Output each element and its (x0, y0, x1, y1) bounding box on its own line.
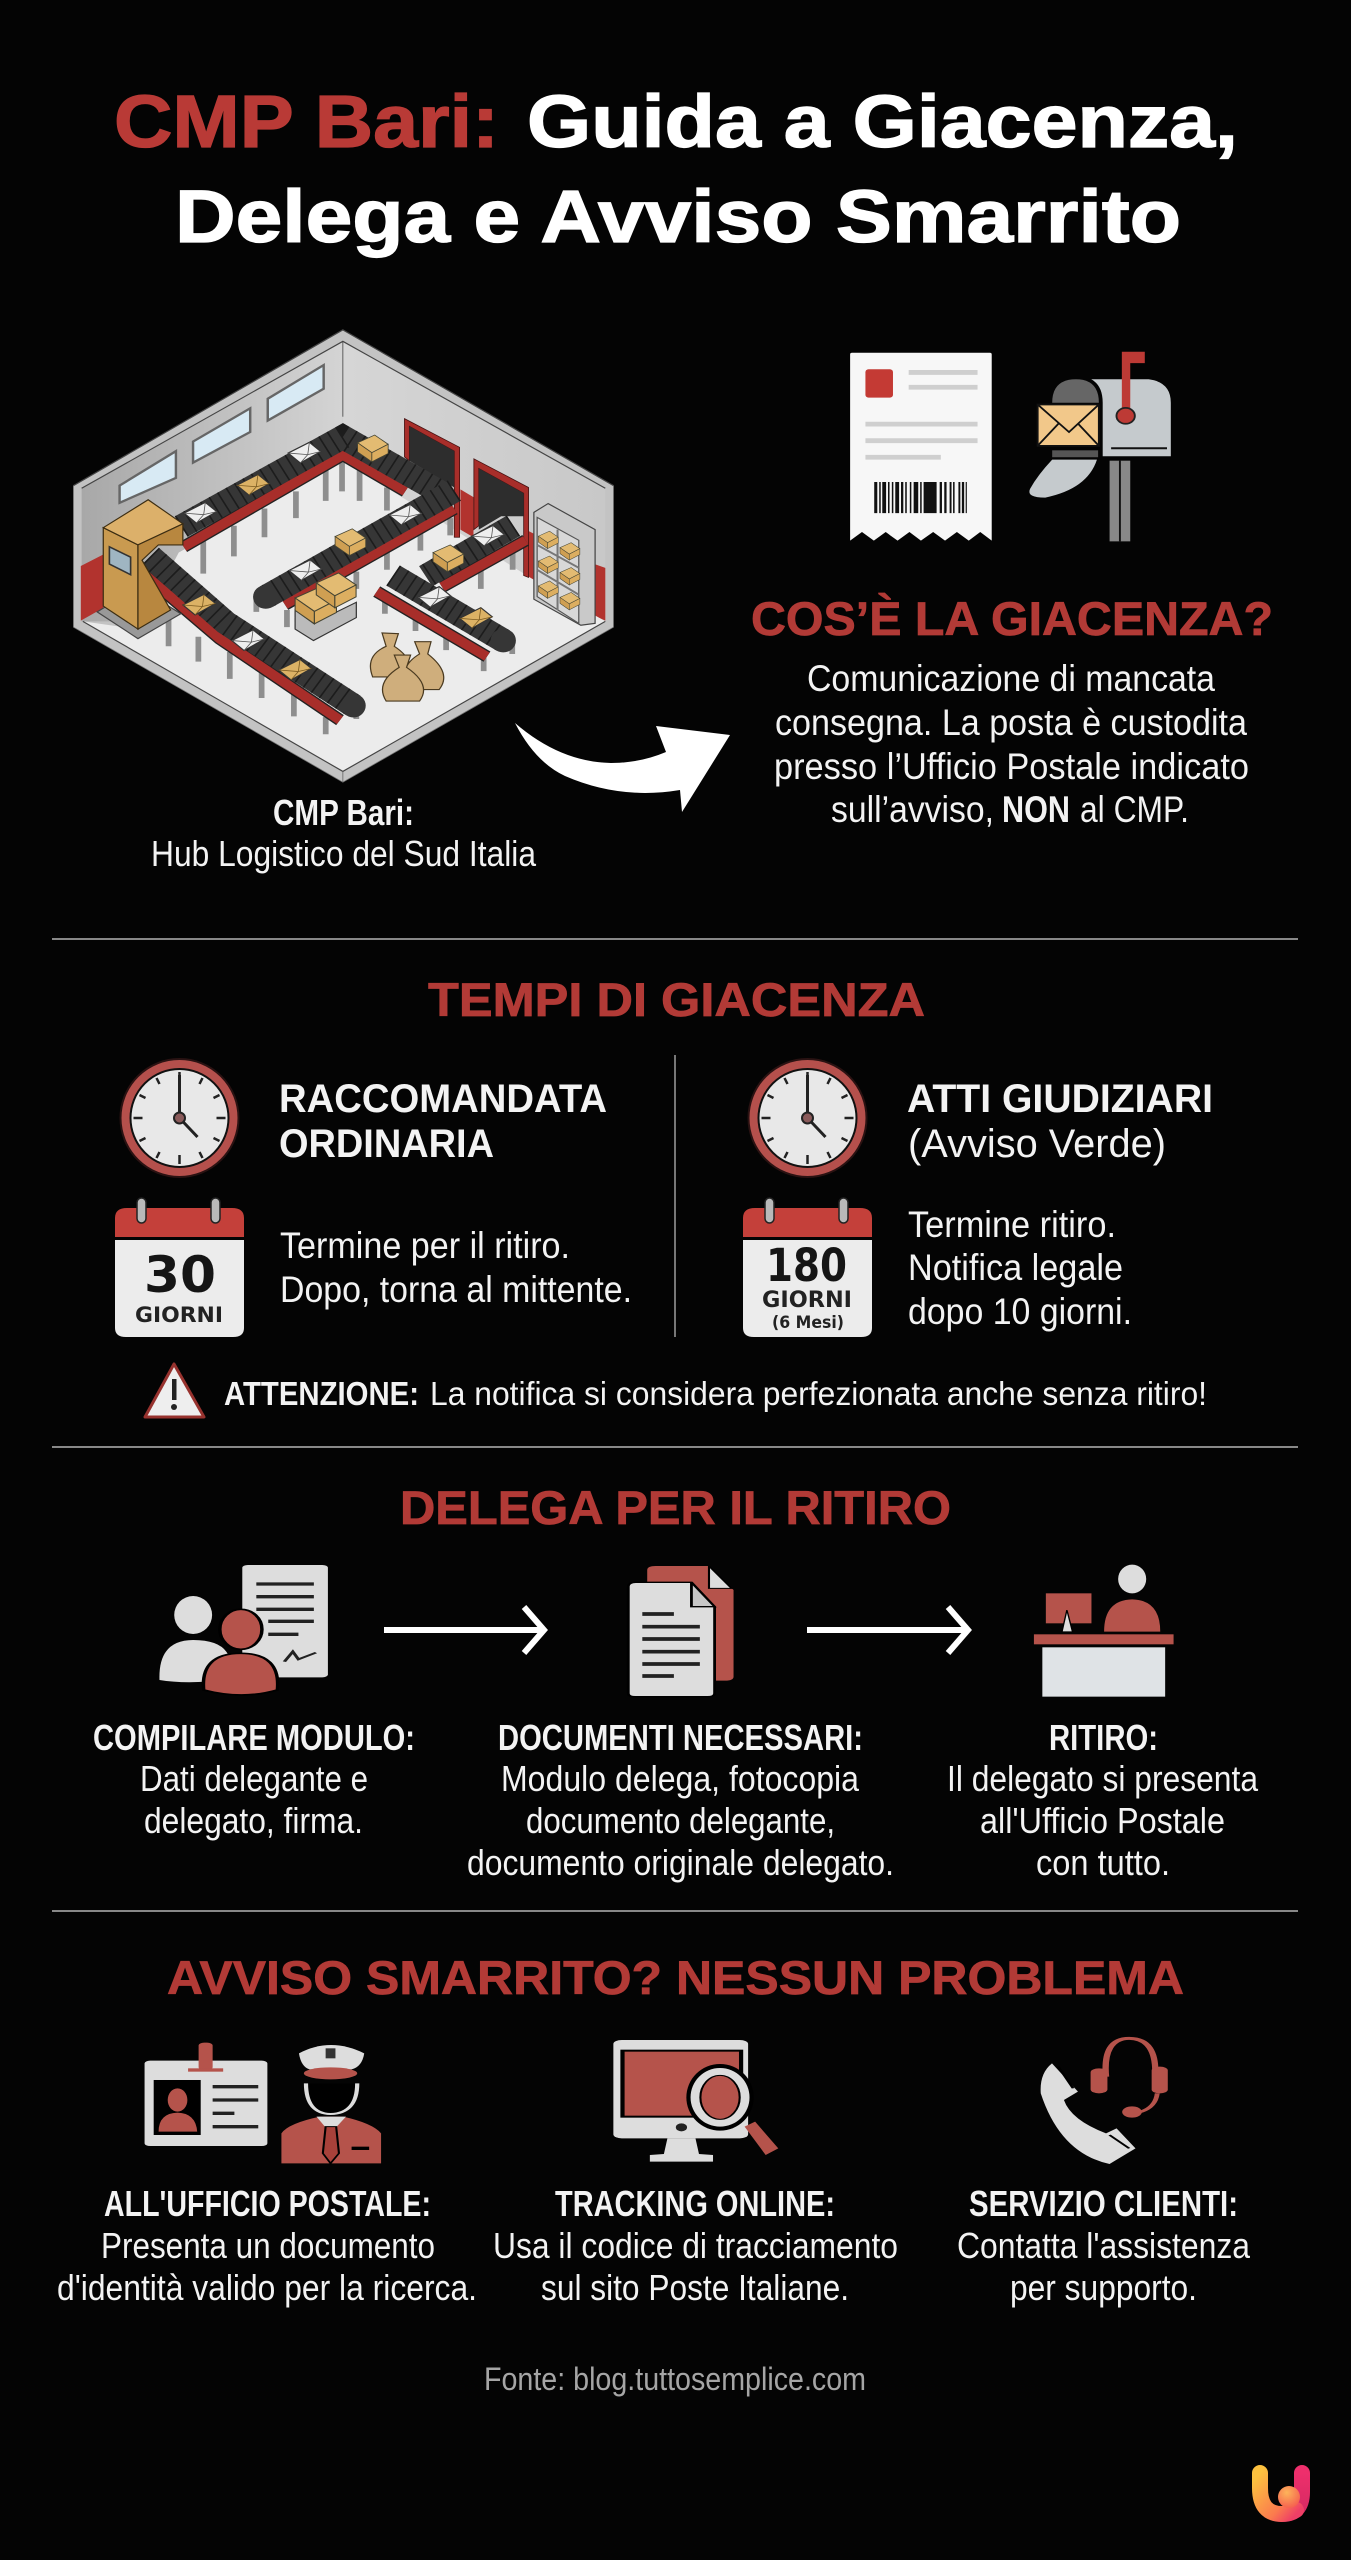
text: giacenza definition: Comunicazione di mancata (807, 658, 1215, 699)
icon: mailbox (1029, 352, 1171, 541)
icon: documents (628, 1566, 734, 1697)
text: termine ritiro atti: Termine ritiro. (908, 1204, 1116, 1245)
step: compilare modulo (93, 1717, 415, 1841)
text: giacenza definition: presso l’Ufficio Postale indicato (774, 746, 1249, 787)
heading: delega per il ritiro: DELEGA PER IL RITIRO (400, 1481, 951, 1534)
panel: atti giudiziari (743, 1059, 1213, 1337)
step: documenti necessari (467, 1717, 894, 1883)
step: documenti necessari: documento originale delegato. (467, 1842, 894, 1883)
panel: raccomandata ordinaria (115, 1059, 632, 1337)
text: termine ritiro atti: Notifica legale (908, 1247, 1123, 1288)
step: compilare modulo: Dati delegante e (140, 1758, 368, 1799)
icon: calendar 30 giorni: GIORNI (135, 1303, 223, 1327)
floor (83, 461, 605, 771)
arrow: hub to giacenza (515, 723, 730, 812)
machine (97, 500, 183, 639)
icon: calendar 180 giorni: GIORNI (762, 1288, 852, 1313)
step: ritiro (947, 1717, 1259, 1883)
callout: attenzione: ATTENZIONE: (224, 1375, 419, 1412)
option: servizio clienti: per supporto. (1010, 2267, 1197, 2308)
text: giacenza definition: sull’avviso, (831, 789, 994, 830)
option: all'ufficio postale: d'identità valido per la ricerca. (57, 2267, 477, 2308)
title: Delega e Avviso Smarrito (175, 175, 1181, 258)
arrow (807, 1607, 968, 1653)
step: compilare modulo: COMPILARE MODULO: (93, 1717, 415, 1758)
icon: calendar 180 giorni: 180 (766, 1239, 847, 1292)
option: tracking online (493, 2183, 898, 2308)
option: tracking online: sul sito Poste Italiane. (541, 2267, 849, 2308)
icon: delivery notice receipt (850, 353, 992, 541)
caption: CMP Bari hub (151, 792, 537, 874)
heading: raccomandata: RACCOMANDATA (279, 1077, 607, 1121)
icon: calendar 30 giorni (115, 1198, 244, 1337)
option: all'ufficio postale: Presenta un documento (101, 2225, 435, 2266)
heading: avviso smarrito: AVVISO SMARRITO? NESSUN PROBLEMA (167, 1951, 1184, 2004)
text: giacenza definition (774, 658, 1249, 830)
shelf (534, 504, 595, 625)
step: documenti necessari: documento delegante, (526, 1800, 835, 1841)
icon: calendar 180 giorni (743, 1198, 872, 1337)
text: giacenza definition: al CMP. (1080, 789, 1189, 830)
option: servizio clienti: Contatta l'assistenza (957, 2225, 1251, 2266)
step: documenti necessari: Modulo delega, fotocopia (501, 1758, 860, 1799)
title: CMP Bari: (114, 80, 499, 163)
step: ritiro: Il delegato si presenta (947, 1758, 1259, 1799)
icon: people and signed form (159, 1565, 328, 1695)
option: servizio clienti (957, 2183, 1251, 2308)
logo (1260, 2473, 1302, 2514)
option: servizio clienti: SERVIZIO CLIENTI: (969, 2183, 1238, 2224)
icon: ID card and postal officer (145, 2043, 381, 2163)
step: ritiro: RITIRO: (1049, 1717, 1158, 1758)
heading: atti giudiziari: (Avviso Verde) (908, 1122, 1166, 1166)
arrow (384, 1607, 544, 1653)
source: Fonte: blog.tuttosemplice.com (484, 2361, 866, 2397)
callout: attenzione: La notifica si considera perfezionata anche senza ritiro! (430, 1375, 1207, 1412)
icon: clock (120, 1059, 238, 1177)
icon: clock (748, 1059, 866, 1177)
text: termine ritiro: Dopo, torna al mittente. (280, 1269, 632, 1310)
heading: cos'è la giacenza: COS’È LA GIACENZA? (751, 592, 1273, 645)
icon: warning triangle (145, 1364, 204, 1417)
option: all'ufficio postale (57, 2183, 477, 2308)
option: tracking online: TRACKING ONLINE: (555, 2183, 835, 2224)
text: termine ritiro atti (908, 1204, 1132, 1332)
step: compilare modulo: delegato, firma. (144, 1800, 363, 1841)
heading: tempi di giacenza: TEMPI DI GIACENZA (428, 973, 925, 1026)
text: termine ritiro (280, 1225, 632, 1310)
text: giacenza definition: NON (1002, 789, 1070, 830)
step: ritiro: con tutto. (1036, 1842, 1170, 1883)
title: Guida a Giacenza, (527, 80, 1238, 163)
heading: atti giudiziari (907, 1077, 1213, 1166)
title (114, 80, 1238, 258)
heading: raccomandata: ORDINARIA (279, 1122, 494, 1166)
text: giacenza definition: consegna. La posta è custodita (775, 702, 1247, 743)
option: tracking online: Usa il codice di tracciamento (493, 2225, 898, 2266)
icon: phone and headset (1041, 2038, 1168, 2164)
icon: post office counter (1034, 1565, 1174, 1697)
heading: raccomandata (279, 1077, 607, 1166)
heading: atti giudiziari: ATTI GIUDIZIARI (907, 1077, 1213, 1121)
icon: monitor with magnifier (613, 2040, 778, 2162)
mail sacks (370, 633, 444, 701)
step: documenti necessari: DOCUMENTI NECESSARI: (498, 1717, 863, 1758)
icon: calendar 30 giorni: 30 (144, 1246, 216, 1304)
step: ritiro: all'Ufficio Postale (980, 1800, 1225, 1841)
illustration: CMP Bari isometric sorting hub (73, 330, 613, 782)
sorting crate (295, 573, 356, 641)
icon: calendar 180 giorni: (6 Mesi) (772, 1313, 844, 1333)
caption: CMP Bari hub: Hub Logistico del Sud Italia (151, 833, 537, 874)
text: termine ritiro: Termine per il ritiro. (280, 1225, 570, 1266)
text: termine ritiro atti: dopo 10 giorni. (908, 1291, 1132, 1332)
caption: CMP Bari hub: CMP Bari: (273, 792, 414, 833)
option: all'ufficio postale: ALL'UFFICIO POSTALE: (104, 2183, 431, 2224)
